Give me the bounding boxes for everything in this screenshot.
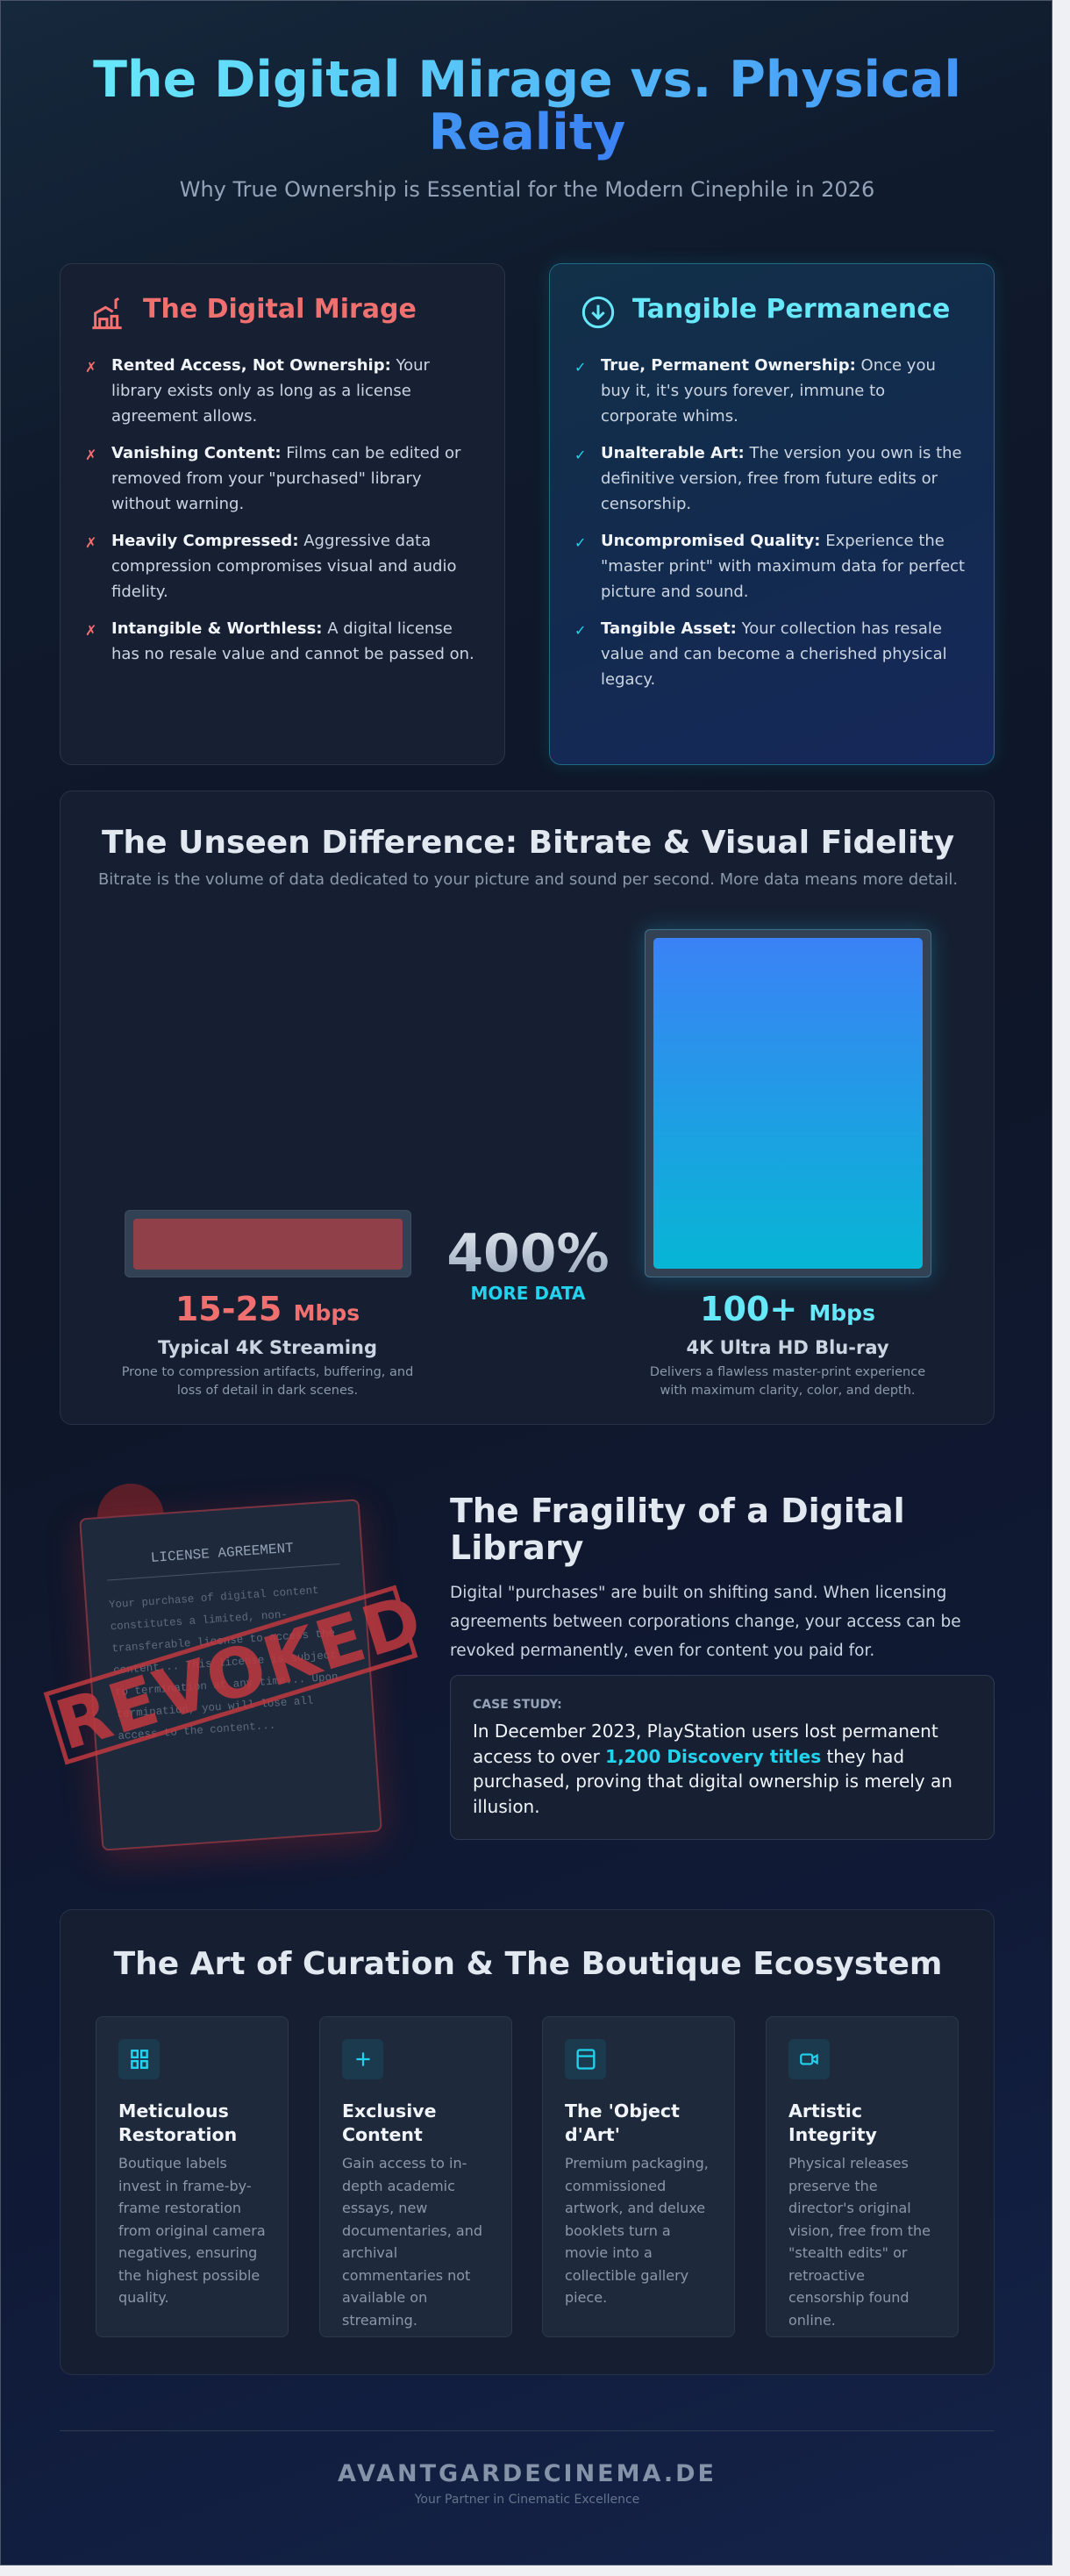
label: blu-ray: Delivers a flawless master-print experience bbox=[650, 1365, 925, 1379]
card: object d'art bbox=[542, 2016, 735, 2337]
label: blu-ray: 4K Ultra HD Blu-ray bbox=[686, 1337, 889, 1358]
callout: case study: CASE STUDY: bbox=[473, 1698, 562, 1712]
callout: case study bbox=[450, 1675, 995, 1840]
list: Tangible Asset: Your collection has resale value and can become a cherished physical legacy. bbox=[601, 619, 947, 689]
list bbox=[574, 356, 965, 689]
panel: tangible permanence: ✓ bbox=[574, 622, 586, 639]
stat: 400%: MORE DATA bbox=[470, 1283, 586, 1304]
panel: digital mirage bbox=[60, 263, 505, 765]
stat: 400%: 400% bbox=[446, 1223, 610, 1284]
bar: blu-ray bbox=[645, 929, 931, 1277]
heading: fragility: The Fragility of a Digital Library bbox=[450, 1492, 905, 1567]
card: restoration bbox=[96, 2016, 289, 2337]
footer: AVANTGARDECINEMA.DE bbox=[338, 2460, 717, 2487]
subtitle: Bitrate is the volume of data dedicated to your picture and sound per second. More data means more detail. bbox=[98, 870, 958, 889]
panel: tangible permanence bbox=[549, 263, 995, 765]
card: object d'art: The 'Object d'Art' bbox=[565, 2100, 680, 2145]
title: Reality bbox=[429, 104, 625, 161]
card: object d'art: Premium packaging, commissioned artwork, and deluxe booklets turn a movie into a collectible gallery piece. bbox=[565, 2155, 709, 2306]
list bbox=[85, 356, 474, 663]
card: artistic integrity: Physical releases preserve the director's original vision, free from the "stealth edits" or retroactive censorship found online. bbox=[788, 2155, 931, 2329]
panel: bitrate bbox=[60, 791, 995, 1425]
list: Vanishing Content: Films can be edited or removed from your "purchased" library without warning. bbox=[111, 444, 460, 513]
list: Heavily Compressed: Aggressive data compression compromises visual and audio fidelity. bbox=[111, 532, 456, 601]
panel: digital mirage: ✗ bbox=[85, 534, 96, 551]
card: restoration: Boutique labels invest in frame-by-frame restoration from original camera negatives, ensuring the highest possible quality. bbox=[118, 2155, 266, 2306]
bar: streaming bbox=[125, 1210, 411, 1277]
icon: download circle bbox=[582, 297, 614, 328]
heading: The Art of Curation & The Boutique Ecosystem bbox=[114, 1946, 942, 1982]
card: restoration: Meticulous Restoration bbox=[118, 2100, 237, 2145]
panel: tangible permanence: ✓ bbox=[574, 534, 586, 551]
list: buy it, it's yours forever, immune to bbox=[601, 382, 885, 400]
title bbox=[93, 51, 961, 161]
heading: Tangible Permanence bbox=[632, 294, 950, 325]
list: Rented Access, Not Ownership: Your library exists only as long as a license agreement allows. bbox=[111, 356, 430, 426]
callout: case study: In December 2023, PlayStation users lost permanent access to over 1,200 Discovery titles they had purchased, proving that digital ownership is merely an illusion. bbox=[473, 1721, 952, 1816]
card: artistic integrity bbox=[766, 2016, 959, 2337]
list: Unalterable Art: The version you own is the definitive version, free from future edits or censorship. bbox=[601, 444, 962, 513]
panel: curation bbox=[60, 1909, 995, 2375]
label: streaming bbox=[122, 1290, 413, 1398]
card: exclusive content: Exclusive Content bbox=[342, 2100, 437, 2145]
card: artistic integrity: Artistic Integrity bbox=[788, 2100, 877, 2145]
heading: The Unseen Difference: Bitrate & Visual Fidelity bbox=[102, 825, 954, 861]
panel: digital mirage: ✗ bbox=[85, 359, 96, 376]
card: exclusive content: Gain access to in-depth academic essays, new documentaries, and archival commentaries not available on streaming. bbox=[342, 2155, 482, 2329]
subtitle: Why True Ownership is Essential for the Modern Cinephile in 2026 bbox=[180, 177, 874, 202]
card: exclusive content bbox=[319, 2016, 512, 2337]
list: corporate whims. bbox=[601, 407, 738, 426]
text: fragility: Digital "purchases" are built on shifting sand. When licensing agreements between corporations change, your access can be revoked permanently, even for content you paid for. bbox=[450, 1584, 961, 1660]
panel: tangible permanence: ✓ bbox=[574, 447, 586, 463]
label: streaming: 15-25 Mbps bbox=[175, 1290, 360, 1328]
label: blu-ray: 100+ Mbps bbox=[700, 1290, 875, 1328]
document bbox=[79, 1499, 382, 1851]
list: Intangible & Worthless: A digital license has no resale value and cannot be passed on. bbox=[111, 619, 474, 663]
illustration: revoked license bbox=[44, 1484, 432, 1872]
heading: The Digital Mirage bbox=[143, 294, 417, 325]
label: streaming: Prone to compression artifacts, buffering, and bbox=[122, 1365, 413, 1379]
list: True, Permanent Ownership: Once you bbox=[601, 356, 936, 375]
document: LICENSE AGREEMENT bbox=[150, 1541, 294, 1566]
document: Your purchase of digital content constitutes a limited, non-transferable license to access the content... This license is subject to termination at any time... Upon termination, you will lose all access to the content... bbox=[109, 1585, 339, 1742]
title: The Digital Mirage vs. Physical bbox=[93, 51, 961, 109]
icon: broken house bbox=[92, 297, 122, 330]
list: Uncompromised Quality: Experience the "master print" with maximum data for perfect picture and sound. bbox=[601, 532, 965, 601]
panel: digital mirage: ✗ bbox=[85, 447, 96, 463]
panel: digital mirage: ✗ bbox=[85, 622, 96, 639]
label: streaming: Typical 4K Streaming bbox=[158, 1337, 377, 1358]
stamp: REVOKED bbox=[47, 1580, 432, 1766]
label: blu-ray bbox=[650, 1290, 925, 1398]
footer bbox=[338, 2460, 717, 2507]
label: streaming: loss of detail in dark scenes. bbox=[177, 1384, 358, 1398]
footer: Your Partner in Cinematic Excellence bbox=[415, 2493, 639, 2507]
panel: tangible permanence: ✓ bbox=[574, 359, 586, 376]
label: blu-ray: with maximum clarity, color, and depth. bbox=[660, 1384, 916, 1398]
